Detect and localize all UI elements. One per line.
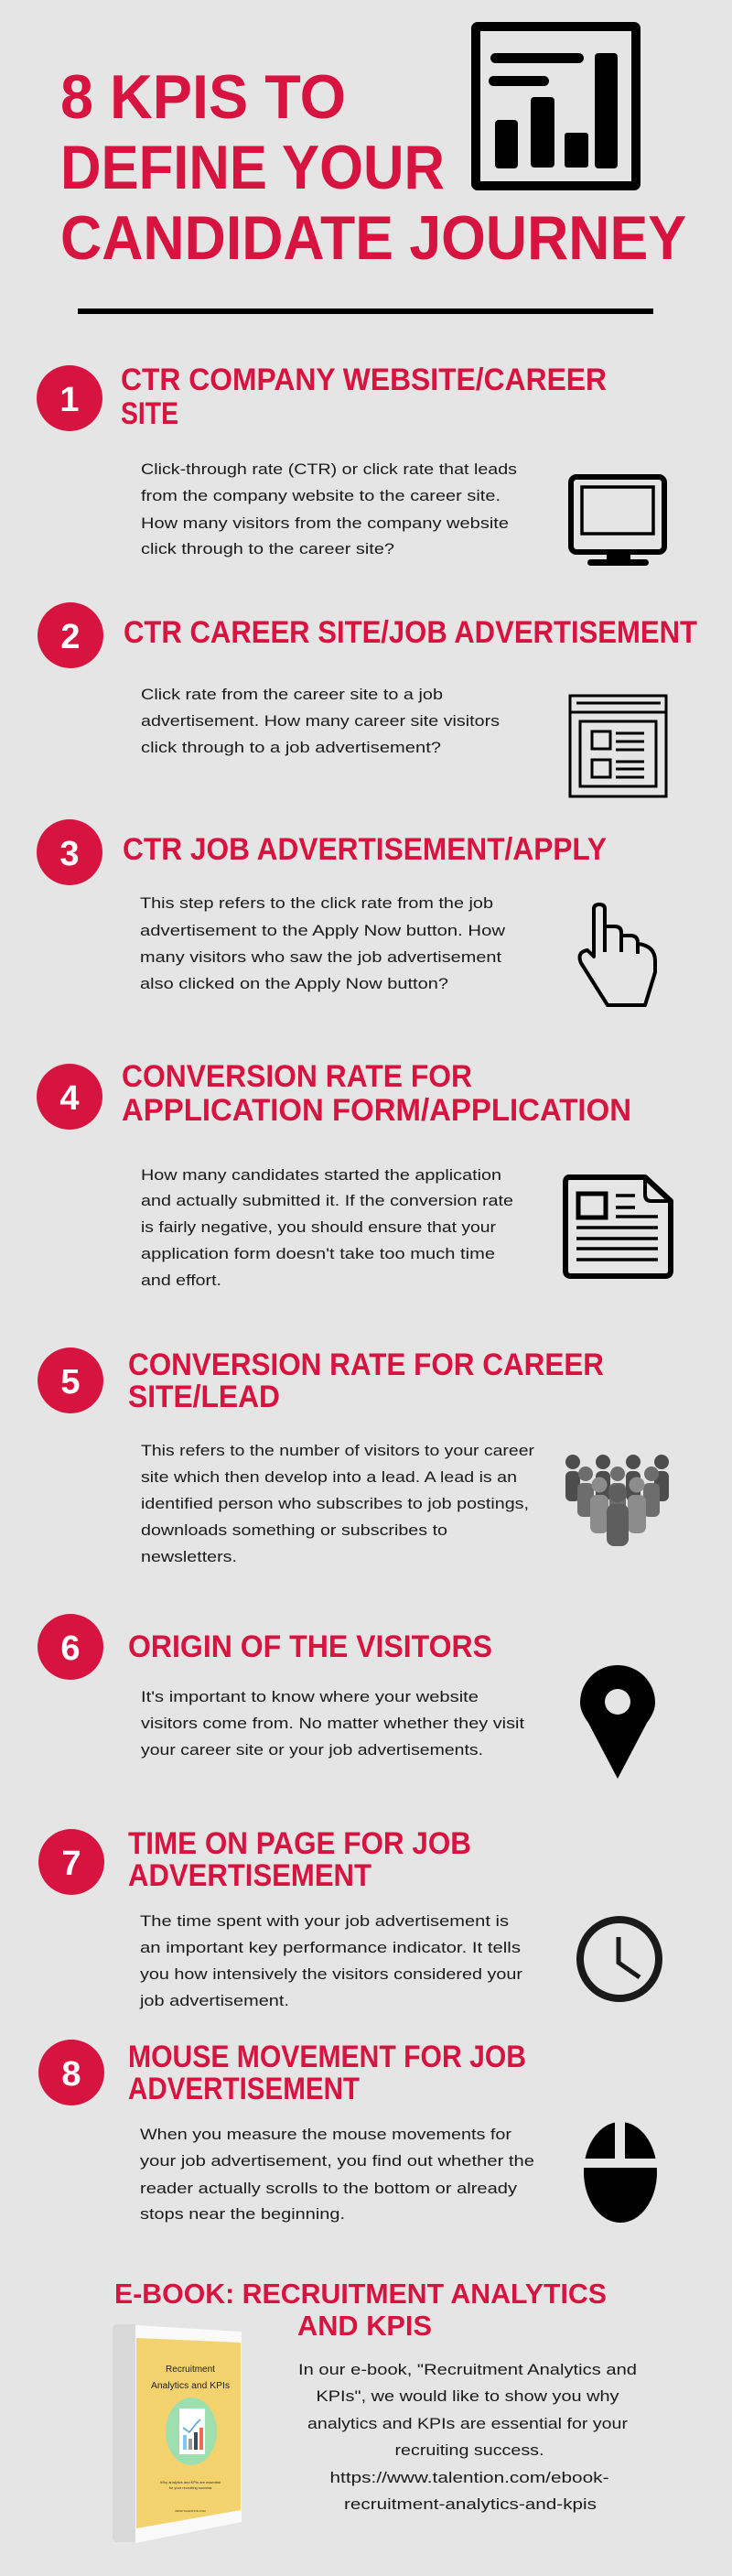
section 1	[37, 363, 664, 566]
text 2	[141, 687, 500, 756]
text 4: application form doesn't take too much time	[141, 1246, 495, 1262]
text 2: click through to a job advertisement?	[141, 740, 441, 756]
text 6	[141, 1689, 525, 1759]
text 6: your career site or your job advertisements.	[141, 1742, 483, 1759]
icon: report chart	[476, 27, 636, 186]
e-book text: https://www.talention.com/ebook-	[329, 2470, 609, 2486]
icon: browser page	[570, 696, 666, 796]
heading 5	[128, 1348, 604, 1414]
heading 4	[122, 1059, 631, 1128]
number badge 4	[37, 1064, 102, 1130]
e-book cover	[113, 2324, 242, 2543]
e-book text: recruitment-analytics-and-kpis	[344, 2496, 597, 2513]
number badge 6	[38, 1614, 103, 1680]
e-book cover: for your recruiting success	[169, 2485, 211, 2490]
e-book text: recruiting success.	[395, 2442, 544, 2459]
text 8: When you measure the mouse movements for	[140, 2127, 512, 2143]
title: DEFINE YOUR	[60, 133, 445, 202]
text 7: an important key performance indicator. It tells	[140, 1940, 521, 1956]
text 3	[140, 895, 505, 992]
text 7: job advertisement.	[139, 1993, 289, 2009]
section 2	[38, 602, 697, 796]
title	[60, 62, 686, 273]
text 3: also clicked on the Apply Now button?	[140, 976, 448, 992]
icon: document	[565, 1177, 671, 1276]
text 7	[139, 1913, 523, 2009]
number badge 2: 2	[60, 618, 81, 656]
section 3	[37, 819, 655, 1005]
e-book heading: E-BOOK: RECRUITMENT ANALYTICS	[114, 2278, 607, 2310]
text 8	[140, 2127, 534, 2223]
text 3: This step refers to the click rate from the job	[140, 895, 493, 912]
text 3: advertisement to the Apply Now button. How	[140, 923, 505, 939]
e-book text	[298, 2362, 637, 2513]
text 6: It's important to know where your website	[141, 1689, 479, 1705]
heading 8	[128, 2040, 526, 2106]
section 6	[38, 1614, 655, 1779]
e-book cover: WWW.TALENTION.COM	[175, 2509, 206, 2513]
heading 1: SITE	[121, 396, 178, 431]
heading 3: CTR JOB ADVERTISEMENT/APPLY	[123, 832, 607, 867]
text 1: How many visitors from the company website	[141, 515, 509, 532]
number badge 1	[37, 365, 102, 431]
e-book text: analytics and KPIs are essential for your	[307, 2416, 629, 2432]
text 5: downloads something or subscribes to	[141, 1522, 447, 1539]
number badge 8: 8	[61, 2055, 81, 2094]
icon: location pin	[580, 1665, 655, 1779]
number badge 2	[38, 602, 103, 668]
number badge 3: 3	[59, 835, 80, 873]
text 8: reader actually scrolls to the bottom or already	[140, 2181, 518, 2197]
heading 8: MOUSE MOVEMENT FOR JOB	[128, 2040, 526, 2074]
text 1	[141, 461, 517, 557]
e-book text: In our e-book, "Recruitment Analytics and	[298, 2362, 637, 2378]
icon: pointing hand	[580, 904, 655, 1005]
number badge 7	[38, 1829, 104, 1895]
number badge 5	[38, 1348, 103, 1413]
heading 1: CTR COMPANY WEBSITE/CAREER	[121, 363, 607, 397]
text 7: The time spent with your job advertisement is	[140, 1913, 509, 1930]
text 1: click through to the career site?	[141, 541, 394, 557]
e-book cover: Why analytics and KPIs are essential	[160, 2480, 221, 2484]
text 8: stops near the beginning.	[140, 2206, 345, 2223]
e-book cover: Analytics and KPIs	[151, 2381, 230, 2391]
number badge 3	[37, 819, 102, 885]
heading 7: ADVERTISEMENT	[128, 1858, 371, 1893]
text 6: visitors come from. No matter whether they visit	[141, 1716, 525, 1732]
number badge 5: 5	[60, 1363, 81, 1402]
text 5: identified person who subscribes to job postings,	[141, 1496, 529, 1512]
icon: group of people	[565, 1455, 669, 1546]
text 4	[141, 1167, 513, 1289]
heading 1	[121, 363, 607, 431]
section 8	[38, 2040, 661, 2223]
text 1: from the company website to the career site.	[141, 488, 501, 504]
e-book text: KPIs", we would like to show you why	[317, 2388, 619, 2405]
text 4: is fairly negative, you should ensure that your	[141, 1219, 497, 1236]
text 3: many visitors who saw the job advertisement	[140, 949, 502, 966]
heading 4: CONVERSION RATE FOR	[122, 1059, 472, 1094]
heading 7	[128, 1826, 471, 1893]
text 1: Click-through rate (CTR) or click rate that leads	[141, 461, 517, 478]
text 2: advertisement. How many career site visitors	[141, 713, 500, 730]
icon: monitor	[571, 477, 664, 566]
text 4: and effort.	[141, 1272, 221, 1289]
heading 5: SITE/LEAD	[128, 1380, 280, 1414]
number badge 4: 4	[59, 1079, 80, 1118]
heading 7: TIME ON PAGE FOR JOB	[128, 1826, 471, 1861]
number badge 7: 7	[61, 1845, 81, 1883]
section 7	[38, 1826, 659, 2009]
text 5: This refers to the number of visitors to your career	[141, 1443, 535, 1459]
number badge 1: 1	[59, 381, 80, 419]
section 4	[37, 1059, 671, 1289]
number badge 6: 6	[60, 1629, 81, 1668]
heading 4: APPLICATION FORM/APPLICATION	[122, 1093, 631, 1128]
e-book cover: Recruitment	[166, 2365, 215, 2375]
text 5: site which then develop into a lead. A lead is an	[141, 1469, 517, 1486]
section 5	[38, 1348, 669, 1565]
text 2: Click rate from the career site to a job	[141, 687, 443, 703]
heading 5: CONVERSION RATE FOR CAREER	[128, 1348, 604, 1382]
title: CANDIDATE JOURNEY	[60, 203, 686, 273]
text 5	[141, 1443, 535, 1565]
heading 8: ADVERTISEMENT	[128, 2072, 360, 2106]
text 5: newsletters.	[141, 1549, 237, 1565]
icon: clock	[580, 1920, 659, 1998]
heading 6: ORIGIN OF THE VISITORS	[128, 1629, 492, 1664]
title: 8 KPIS TO	[60, 62, 346, 132]
text 4: How many candidates started the application	[141, 1167, 501, 1184]
icon: mouse	[580, 2119, 661, 2223]
text 4: and actually submitted it. If the conversion rate	[141, 1193, 513, 1209]
e-book heading: AND KPIS	[297, 2310, 432, 2342]
e-book heading	[114, 2278, 607, 2342]
text 8: your job advertisement, you find out whether the	[140, 2153, 534, 2170]
text 7: you how intensively the visitors considered your	[140, 1966, 523, 1983]
number badge 8	[38, 2040, 104, 2105]
